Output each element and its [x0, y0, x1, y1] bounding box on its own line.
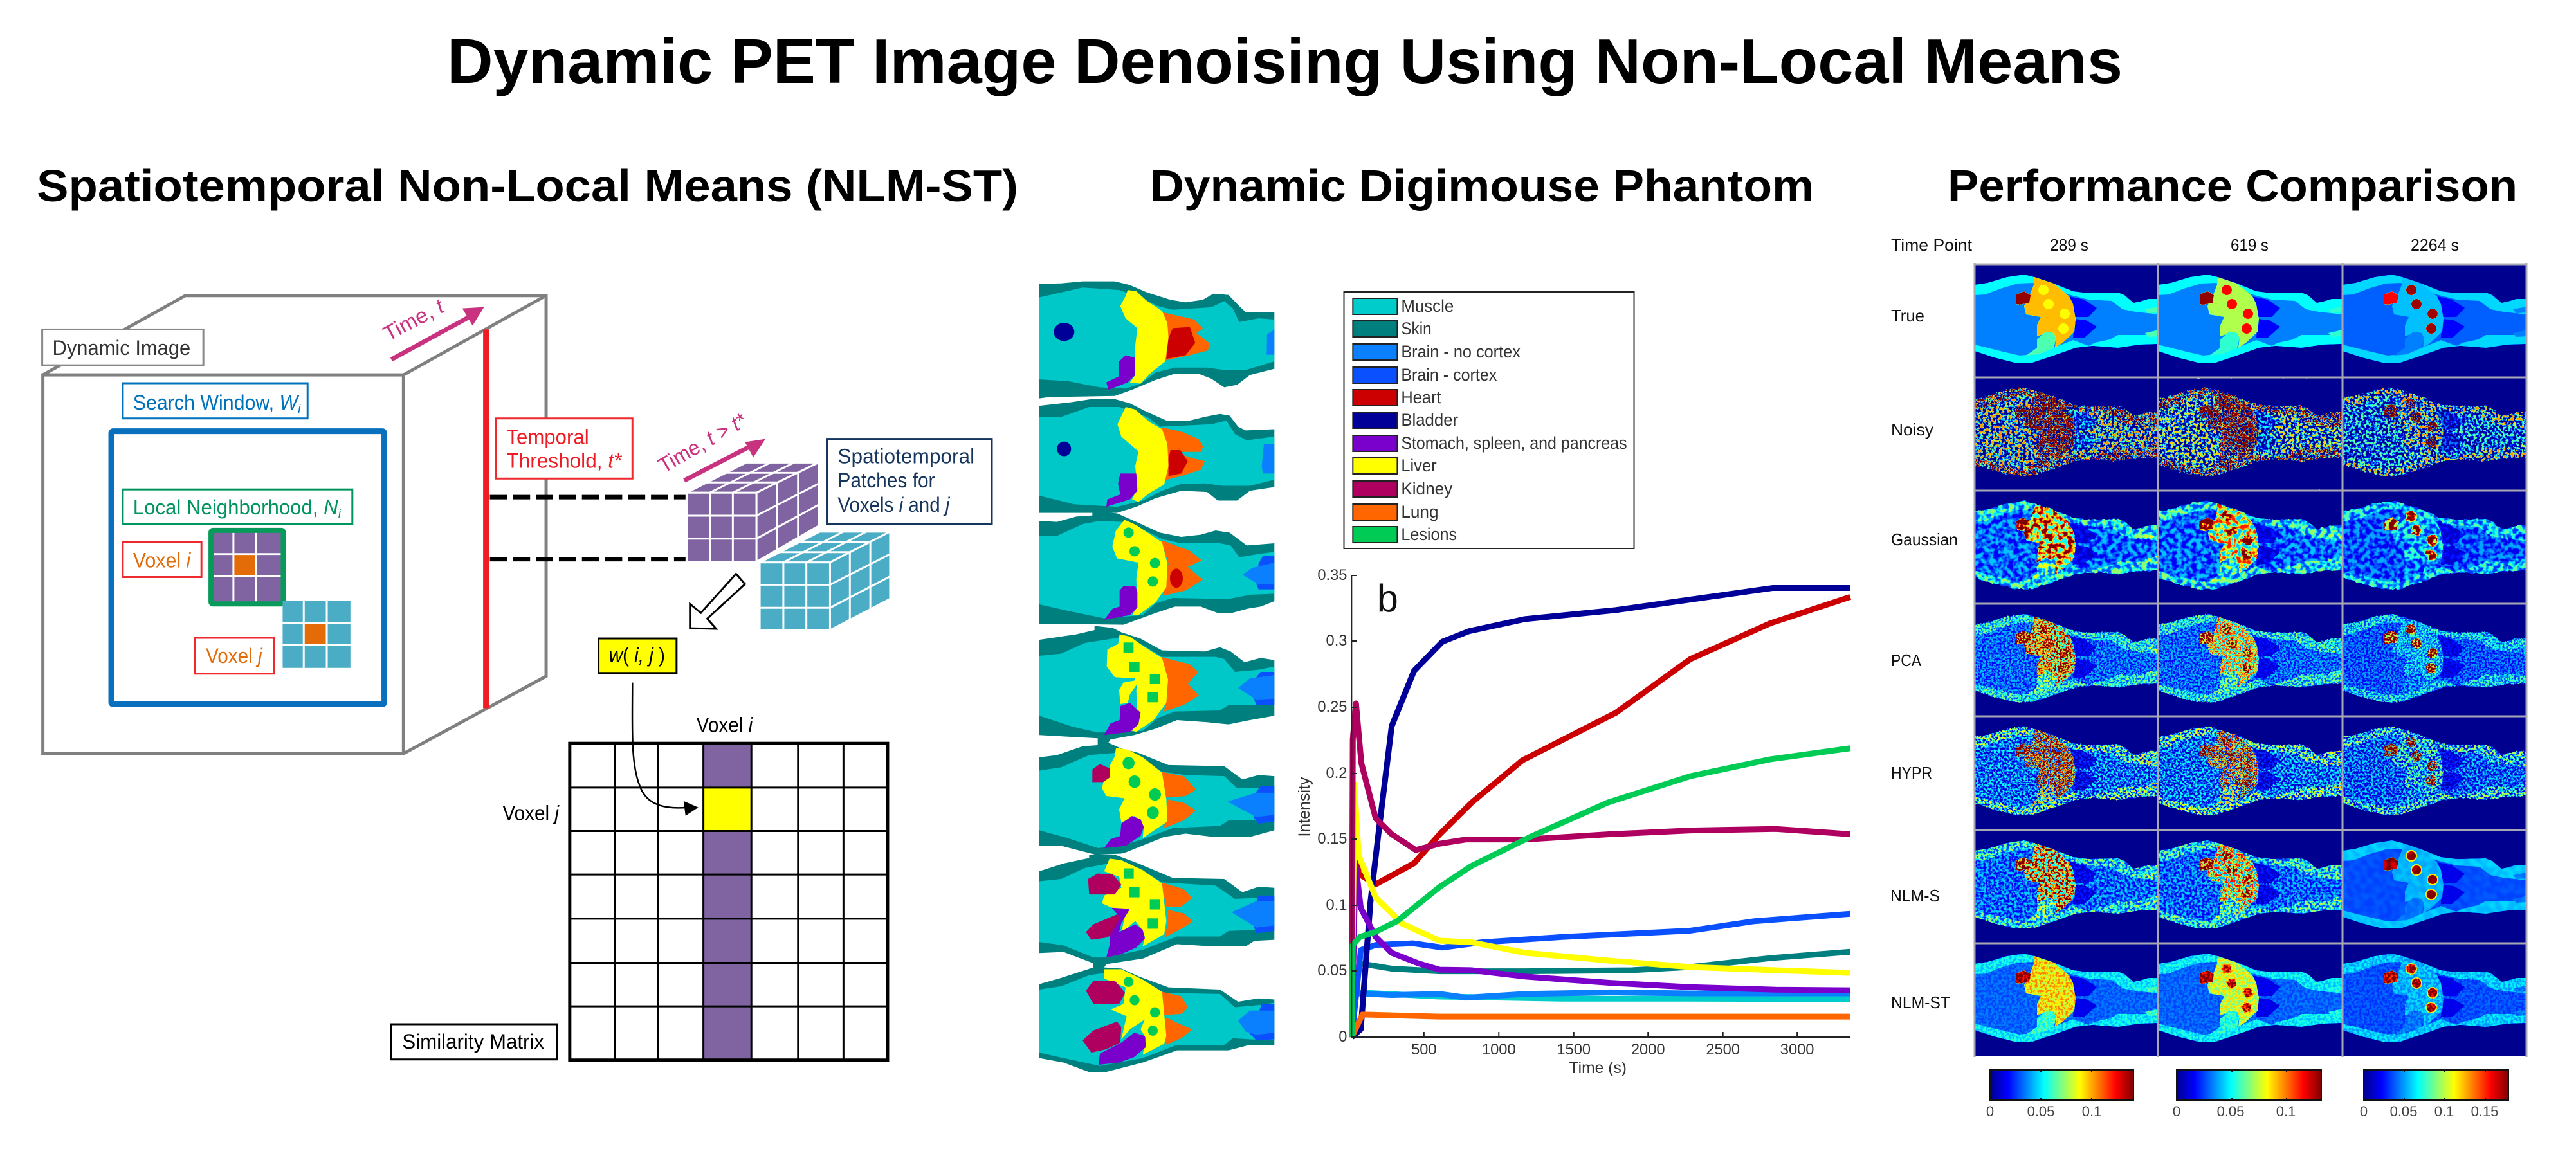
arrow: time — [379, 293, 484, 359]
row: true — [1975, 264, 2527, 377]
hollow arrow — [690, 574, 745, 629]
label: dynamic image: Dynamic Image — [53, 336, 190, 359]
dynamic image cube — [43, 296, 546, 754]
colorbar 2: 0 — [2173, 1103, 2180, 1119]
chart letter: b — [1377, 577, 1398, 620]
heading: NLM-ST: Spatiotemporal Non-Local Means (NLM-ST) — [37, 161, 1018, 211]
legend: Kidney — [1401, 479, 1453, 498]
label: similarity matrix — [391, 1024, 557, 1060]
label: temporal threshold: Temporal — [506, 425, 589, 449]
y tick labels: 0 — [1338, 1028, 1347, 1045]
colorbar 3: 0.15 — [2471, 1103, 2498, 1119]
colorbar 3: 0.1 — [2434, 1103, 2454, 1119]
label: voxel i: Voxel i — [133, 548, 192, 572]
teal spatiotemporal patch — [760, 532, 890, 630]
title: Dynamic PET Image Denoising Using Non-Local Means — [447, 26, 2123, 96]
label: spatiotemporal patches — [827, 439, 992, 524]
column headers: 619 s — [2231, 235, 2269, 255]
label: local neighborhood: i — [338, 507, 341, 521]
image grid — [1975, 264, 2527, 1056]
row: pca — [1975, 604, 2527, 716]
line chart — [1296, 566, 1850, 1077]
row labels — [1890, 306, 1958, 1012]
label: similarity matrix: Similarity Matrix — [402, 1029, 545, 1053]
slices 3-4 — [1039, 511, 1274, 746]
y tick labels: 0.35 — [1317, 566, 1347, 584]
dashed connectors — [490, 497, 686, 559]
label: spatiotemporal patches: Spatiotemporal — [837, 444, 974, 467]
slice 7 — [1039, 963, 1274, 1072]
legend: Brain - no cortex — [1401, 342, 1521, 361]
colorbar 1: 0 — [1986, 1103, 1994, 1119]
weight box — [599, 638, 677, 673]
patch i — [211, 530, 283, 604]
colorbar 2: 0.1 — [2276, 1103, 2296, 1119]
row: hypr — [1975, 716, 2527, 830]
purple spatiotemporal patch — [687, 462, 819, 562]
y tick labels: 0.15 — [1317, 830, 1347, 847]
legend: Lesions — [1401, 525, 1457, 544]
y axis title: Intensity — [1296, 777, 1313, 837]
grid lines — [1974, 263, 2527, 1057]
arrow: time: Time, t — [379, 293, 449, 346]
legend: Bladder — [1401, 410, 1458, 430]
x tick labels: 3000 — [1780, 1041, 1814, 1058]
label: voxel i — [123, 542, 201, 577]
label: spatiotemporal patches: Voxels i and j — [837, 493, 951, 516]
label: voxel j axis: Voxel j — [502, 801, 560, 825]
x tick labels — [1411, 1041, 1814, 1058]
x axis title: Time (s) — [1569, 1060, 1627, 1077]
x tick labels: 1000 — [1482, 1041, 1516, 1058]
panel: NLM-ST diagram — [42, 293, 992, 1060]
label: search window — [123, 383, 307, 419]
colorbar 3: 0 — [2360, 1103, 2368, 1119]
legend: Stomach, spleen, and pancreas — [1401, 433, 1627, 453]
y tick labels: 0.1 — [1326, 896, 1347, 914]
y tick labels: 0.2 — [1326, 764, 1347, 782]
row: nlm-s — [1975, 830, 2527, 943]
column headers: 2264 s — [2411, 235, 2459, 255]
row labels: PCA — [1891, 651, 1922, 670]
row labels: HYPR — [1891, 763, 1932, 783]
y tick labels — [1317, 566, 1347, 1045]
legend: Liver — [1401, 456, 1437, 475]
row labels: Gaussian — [1891, 530, 1958, 549]
similarity matrix — [570, 743, 888, 1060]
colorbar 1: 0.1 — [2082, 1103, 2101, 1119]
heading: Performance: Performance Comparison — [1948, 161, 2517, 211]
slice 1 — [1039, 282, 1274, 399]
y tick labels: 0.05 — [1317, 962, 1347, 979]
slice 4 — [1039, 626, 1274, 746]
label: search window: Search Window, W — [133, 390, 299, 414]
temporal threshold line — [483, 329, 489, 708]
colorbar 3: 0.05 — [2390, 1103, 2417, 1119]
y tick labels: 0.25 — [1317, 698, 1347, 716]
weight box: w( i, j ) — [608, 643, 665, 667]
column headers — [1891, 235, 2459, 255]
slices 1-2 — [1039, 282, 1274, 513]
label: dynamic image — [42, 329, 203, 365]
x tick labels: 2000 — [1631, 1041, 1665, 1058]
colorbar 2: 0.05 — [2217, 1103, 2244, 1119]
panel: legend and time-activity chart — [1296, 292, 1850, 1077]
legend: Muscle — [1401, 296, 1454, 316]
row labels: True — [1891, 306, 1924, 325]
colorbar 3 — [2360, 1070, 2508, 1119]
legend: Heart — [1401, 388, 1441, 407]
row: gaussian — [1975, 491, 2527, 604]
slice 3 — [1039, 511, 1274, 625]
curved arrow to matrix cell — [632, 683, 699, 816]
label: local neighborhood: Local Neighborhood, N — [133, 495, 339, 519]
legend: Skin — [1401, 319, 1432, 338]
label: voxel j — [195, 638, 274, 674]
label: voxel i axis: Voxel i — [697, 712, 754, 736]
row: noisy — [1975, 377, 2527, 491]
legend: Brain - cortex — [1401, 365, 1497, 385]
slice 6 — [1039, 855, 1274, 968]
row labels: Noisy — [1891, 420, 1933, 439]
patch j — [282, 601, 351, 668]
label: temporal threshold: Threshold, t* — [506, 448, 623, 472]
slices 5-7 — [1039, 742, 1274, 1072]
label: local neighborhood — [123, 489, 352, 524]
column headers: 289 s — [2050, 235, 2088, 255]
row labels: NLM-S — [1890, 886, 1940, 905]
panel: digimouse slices — [1039, 282, 1274, 1072]
row: nlm-st — [1975, 943, 2527, 1056]
label: voxel j: Voxel j — [206, 644, 263, 667]
colorbar 1 — [1986, 1070, 2133, 1119]
legend — [1344, 292, 1634, 548]
x tick labels: 1500 — [1557, 1041, 1591, 1058]
colorbar 1: 0.05 — [2027, 1103, 2054, 1119]
heading: Digimouse: Dynamic Digimouse Phantom — [1150, 161, 1814, 211]
row labels: NLM-ST — [1891, 993, 1950, 1012]
search window box — [111, 431, 385, 705]
x tick labels: 2500 — [1706, 1041, 1740, 1058]
label: temporal threshold — [496, 419, 632, 478]
chart axes — [1351, 575, 1850, 1037]
label: search window: i — [298, 403, 301, 417]
arrow: time t > t*: Time, t > t* — [654, 408, 751, 477]
column headers: Time Point — [1891, 235, 1973, 255]
slice 5 — [1039, 742, 1274, 855]
label: spatiotemporal patches: Patches for — [837, 468, 935, 492]
y tick labels: 0.3 — [1326, 632, 1347, 649]
x tick labels: 500 — [1411, 1041, 1437, 1058]
colorbar 2 — [2173, 1070, 2321, 1119]
slice 2 — [1039, 399, 1274, 513]
panel: performance comparison — [1890, 235, 2527, 1119]
legend: Lung — [1401, 502, 1439, 521]
chart curves — [1352, 588, 1850, 1037]
